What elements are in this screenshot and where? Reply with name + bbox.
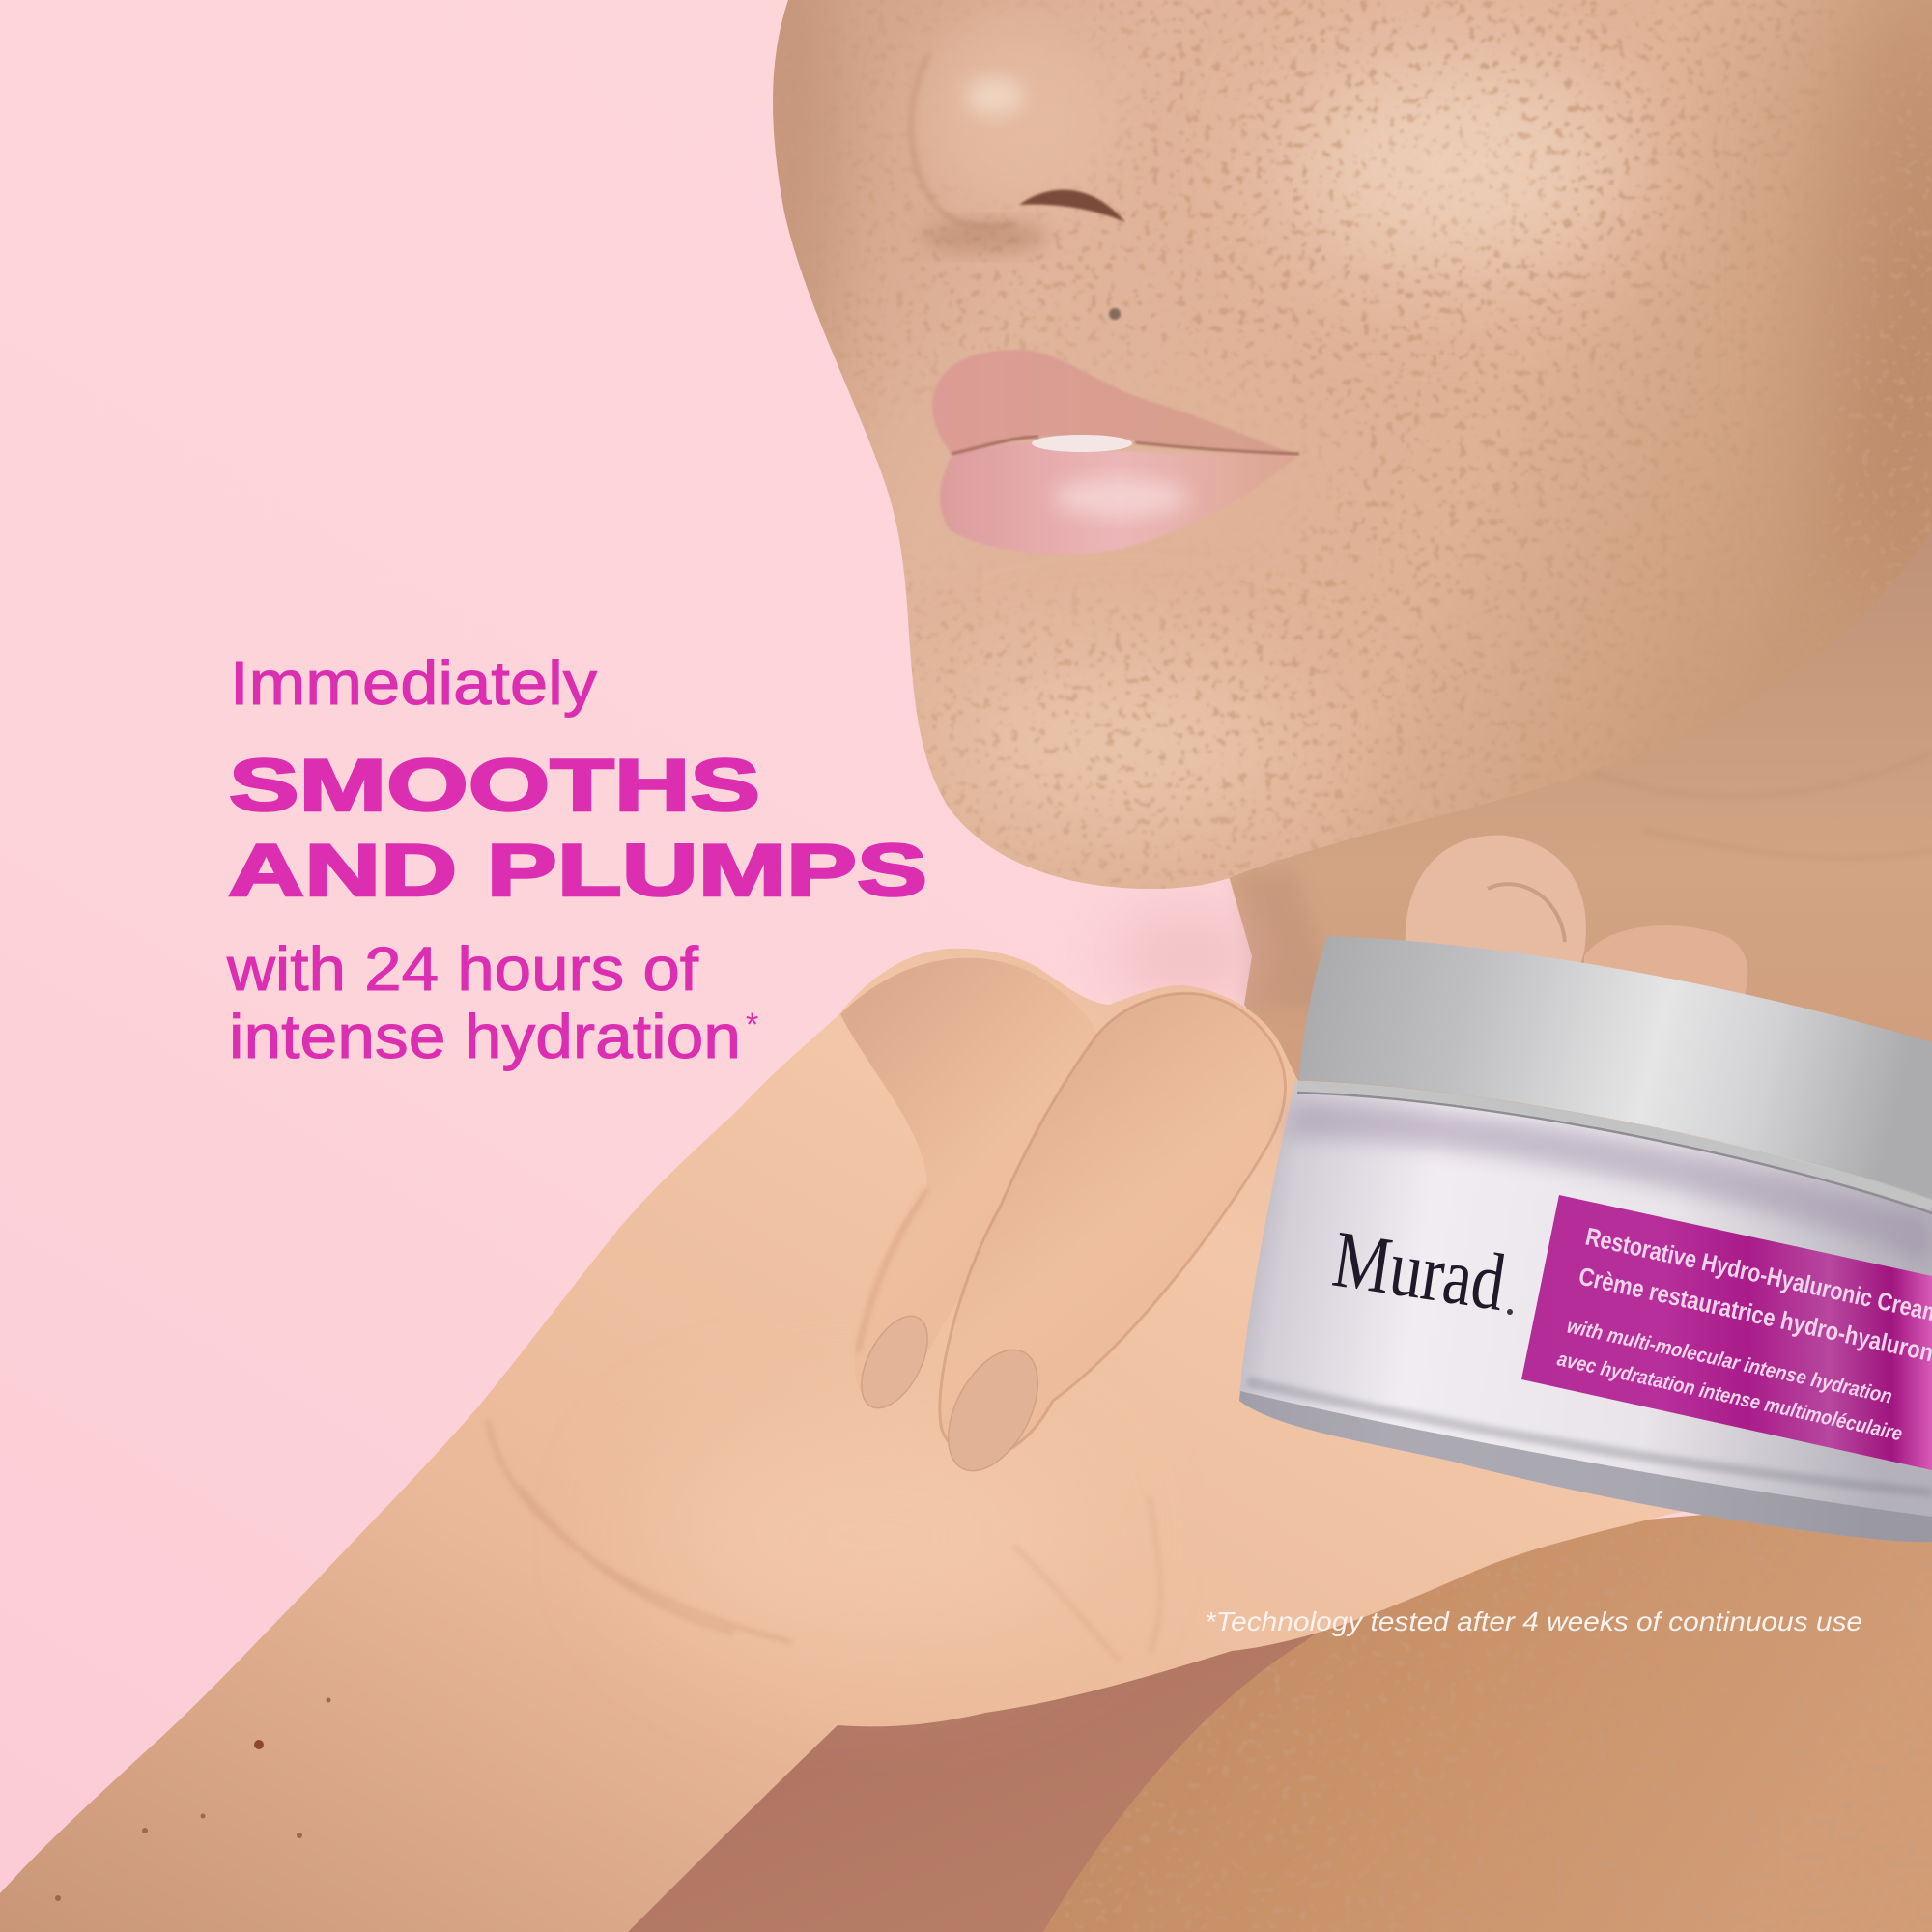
bold headline line 2: AND PLUMPS (228, 830, 927, 912)
headline text block (226, 648, 927, 1071)
lid seam (1297, 1086, 1932, 1206)
mole (1109, 308, 1121, 320)
arm freckles (254, 1740, 264, 1749)
Murad logo: Murad (1327, 1214, 1511, 1328)
fingernail 1 (848, 1305, 941, 1419)
right face shadow (1826, 0, 1932, 628)
lips (932, 350, 1299, 554)
fingers behind jar (1406, 836, 1747, 1000)
product jar (1239, 936, 1932, 1542)
cheek highlight (1285, 58, 1633, 270)
nose (911, 19, 1125, 252)
lip highlight (1053, 478, 1188, 517)
middle finger (930, 993, 1285, 1486)
wrist crease (488, 1420, 792, 1642)
intro line: Immediately (230, 648, 597, 718)
index finger (840, 958, 1097, 1419)
jar shine strip (1246, 1377, 1932, 1497)
jar base band (1239, 1391, 1932, 1542)
arm and hand (0, 949, 1739, 1932)
footnote: *Technology tested after 4 weeks of continuous use (1205, 1606, 1862, 1636)
soft shadow between jaw and hand (1111, 908, 1265, 1005)
left cheek shadow (773, 0, 837, 347)
asterisk: * (746, 1007, 758, 1043)
freckles (773, 0, 1932, 889)
product label (1521, 1195, 1932, 1470)
supporting line 1: with 24 hours of (226, 934, 698, 1004)
palm highlight (647, 1420, 1092, 1652)
jar lid (1298, 936, 1932, 1198)
nose shadow (923, 221, 1048, 252)
shadow gap between arm and shoulder (618, 1565, 1468, 1932)
supporting line 2: intense hydration (229, 1002, 741, 1071)
face (749, 0, 1932, 889)
shoulder (1043, 1507, 1932, 1932)
nostril (1019, 190, 1125, 222)
lip parting line (952, 437, 1299, 454)
fingernail 2 (930, 1335, 1056, 1486)
jar body (1239, 1082, 1932, 1542)
jar upper tint band (1287, 1101, 1932, 1265)
lower lip (940, 442, 1299, 554)
neck (1227, 483, 1932, 1256)
label line 3: with multi-molecular intense hydration (1565, 1315, 1894, 1408)
palm lines (1014, 1497, 1161, 1662)
teeth (1032, 435, 1132, 452)
upper lip (932, 350, 1294, 454)
chin highlight (947, 671, 1314, 816)
bold headline line 1: SMOOTHS (229, 745, 760, 827)
